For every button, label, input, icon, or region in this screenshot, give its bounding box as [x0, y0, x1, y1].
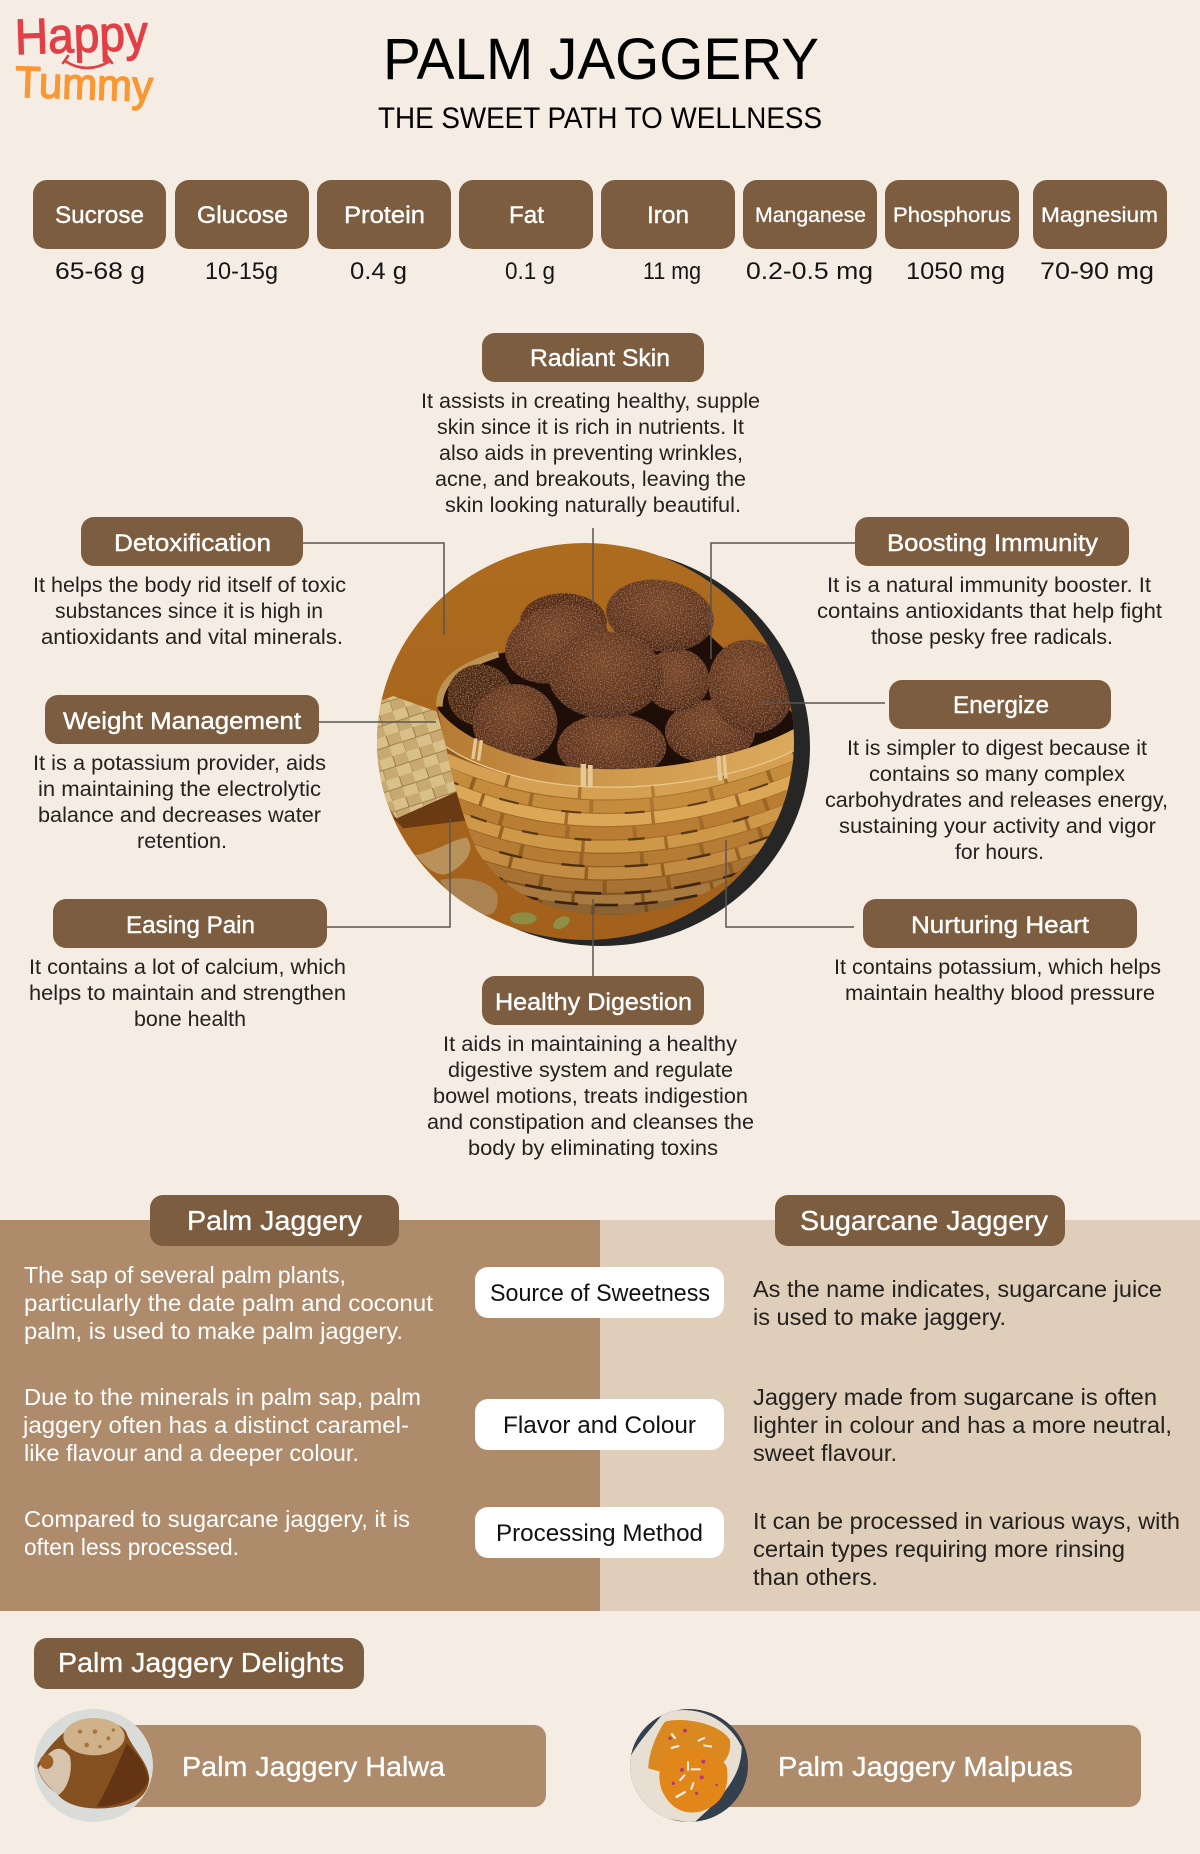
benefit: easing pain: [29, 899, 346, 1031]
benefit: radiant skin: acne, and breakouts, leaving the: [435, 468, 746, 491]
benefit: healthy digestion: digestive system and regulate: [448, 1059, 733, 1082]
nutrient: manganese: Manganese: [755, 204, 866, 227]
benefit: nurturing heart: [834, 899, 1161, 1005]
benefit: radiant skin: also aids in preventing wrinkles,: [439, 442, 743, 465]
nutrient: magnesium: Magnesium: [1041, 204, 1158, 227]
photo: halwa: [34, 1709, 153, 1822]
nutrient: protein: Protein: [344, 202, 425, 229]
benefit: healthy digestion: It aids in maintaining a healthy: [443, 1033, 738, 1056]
nutrient: sucrose: Sucrose: [55, 202, 144, 229]
benefit: energize: It is simpler to digest because it: [847, 737, 1147, 760]
panel: sugarcane jaggery comparison: than others.: [753, 1564, 878, 1590]
panel: palm jaggery comparison: [0, 1195, 600, 1611]
benefit: weight management: retention.: [137, 830, 227, 853]
nutrient: iron: Iron: [647, 202, 689, 229]
nutrient: magnesium: 70-90 mg: [1040, 258, 1154, 285]
card: palm jaggery malpuas: [625, 1705, 1141, 1825]
panel: palm jaggery comparison: like flavour and a deeper colour.: [24, 1440, 359, 1466]
basket rim: [437, 708, 795, 787]
panel: sugarcane jaggery comparison: lighter in colour and has a more neutral,: [753, 1412, 1172, 1438]
nutrient: manganese: [743, 180, 877, 285]
heading: sugarcane jaggery: Sugarcane Jaggery: [800, 1205, 1048, 1236]
woven packet: [373, 696, 457, 818]
label: processing method: Processing Method: [496, 1520, 703, 1547]
panel: palm jaggery comparison: Due to the minerals in palm sap, palm: [24, 1384, 421, 1410]
benefit: healthy digestion: Healthy Digestion: [495, 989, 692, 1016]
panel: palm jaggery comparison: particularly the date palm and coconut: [24, 1290, 434, 1316]
cardamom: [510, 912, 537, 924]
connector lines: [303, 528, 885, 976]
benefit: weight management: in maintaining the electrolytic: [38, 778, 321, 801]
panel: palm jaggery comparison: The sap of several palm plants,: [24, 1262, 346, 1288]
benefit: weight management: Weight Management: [63, 708, 301, 735]
ginger: [415, 837, 470, 874]
benefit: energize: for hours.: [955, 841, 1044, 864]
panel: palm jaggery comparison: jaggery often has a distinct caramel-: [22, 1412, 409, 1438]
benefit: nurturing heart: Nurturing Heart: [911, 912, 1089, 939]
benefit: boosting immunity: It is a natural immunity booster. It: [827, 574, 1151, 597]
panel: sugarcane jaggery comparison: is used to make jaggery.: [753, 1304, 1006, 1330]
nutrient: glucose: 10-15g: [205, 258, 278, 285]
dark circle behind photo: [392, 548, 810, 946]
benefit: boosting immunity: [817, 517, 1162, 649]
benefit: nurturing heart: It contains potassium, which helps: [834, 956, 1161, 979]
panel: sugarcane jaggery comparison: Jaggery made from sugarcane is often: [753, 1384, 1157, 1410]
benefit: detoxification: antioxidants and vital minerals.: [41, 626, 343, 649]
panel: sugarcane jaggery comparison: [600, 1195, 1200, 1611]
nutrient: fat: [459, 180, 593, 285]
logo: Happy Tummy: Happy: [14, 5, 149, 65]
basket body: [446, 747, 795, 915]
benefit: detoxification: substances since it is high in: [55, 600, 323, 623]
floor shadow: [393, 792, 470, 828]
label: source of sweetness: [475, 1267, 724, 1318]
benefit: easing pain: Easing Pain: [126, 912, 255, 939]
heading: palm jaggery delights: [34, 1638, 364, 1689]
benefit: radiant skin: [421, 333, 760, 517]
benefit: easing pain: It contains a lot of calcium, which: [29, 956, 346, 979]
panel: sugarcane jaggery comparison: certain types requiring more rinsing: [753, 1536, 1125, 1562]
logo: Happy Tummy: Tummy: [14, 58, 154, 112]
benefit: healthy digestion: and constipation and cleanses the: [427, 1111, 754, 1134]
benefit: radiant skin: skin looking naturally beautiful.: [445, 494, 741, 517]
label: flavor and colour: [475, 1399, 724, 1450]
panel: sugarcane jaggery comparison: As the name indicates, sugarcane juice: [753, 1276, 1162, 1302]
photo: basket of palm jaggery: [370, 535, 806, 950]
panel: palm jaggery comparison: palm, is used to make palm jaggery.: [24, 1318, 403, 1344]
benefit: radiant skin: Radiant Skin: [530, 345, 670, 372]
benefit: easing pain: bone health: [134, 1008, 246, 1031]
benefit: nurturing heart: maintain healthy blood pressure: [845, 982, 1155, 1005]
nutrient: fat: 0.1 g: [505, 258, 555, 285]
nutrient: manganese: 0.2-0.5 mg: [746, 258, 873, 285]
heading: sugarcane jaggery: [775, 1195, 1065, 1246]
benefit: weight management: [33, 695, 326, 853]
nutrient: phosphorus: 1050 mg: [906, 258, 1005, 285]
panel: palm jaggery comparison: often less processed.: [24, 1534, 239, 1560]
panel: sugarcane jaggery comparison: It can be processed in various ways, with: [753, 1508, 1180, 1534]
benefit: energize: carbohydrates and releases energy,: [825, 789, 1168, 812]
heading: palm jaggery delights: Palm Jaggery Delights: [58, 1647, 344, 1678]
card: palm jaggery malpuas: Palm Jaggery Malpuas: [778, 1751, 1073, 1782]
panel: palm jaggery comparison: Compared to sugarcane jaggery, it is: [24, 1506, 410, 1532]
benefit: energize: contains so many complex: [869, 763, 1126, 786]
card: palm jaggery halwa: Palm Jaggery Halwa: [182, 1751, 445, 1782]
benefit: detoxification: It helps the body rid itself of toxic: [33, 574, 346, 597]
heading: palm jaggery: Palm Jaggery: [187, 1205, 362, 1236]
nutrient: glucose: [175, 180, 309, 285]
benefit: boosting immunity: contains antioxidants that help fight: [817, 600, 1162, 623]
nutrient: phosphorus: Phosphorus: [893, 204, 1011, 227]
label: flavor and colour: Flavor and Colour: [503, 1412, 696, 1439]
benefit: easing pain: helps to maintain and strengthen: [29, 982, 346, 1005]
label: source of sweetness: Source of Sweetness: [490, 1280, 710, 1307]
subtitle: THE SWEET PATH TO WELLNESS: [378, 102, 822, 135]
benefit: healthy digestion: bowel motions, treats indigestion: [433, 1085, 748, 1108]
benefit: radiant skin: It assists in creating healthy, supple: [421, 390, 760, 413]
benefit: weight management: balance and decreases water: [38, 804, 321, 827]
benefit: radiant skin: skin since it is rich in nutrients. It: [437, 416, 744, 439]
nutrient: phosphorus: [885, 180, 1019, 285]
nutrient table: [33, 180, 1167, 285]
heading: palm jaggery: [150, 1195, 399, 1246]
label: processing method: [475, 1507, 724, 1558]
card: palm jaggery halwa: [30, 1705, 546, 1825]
benefit: energize: [825, 680, 1168, 864]
logo: Happy Tummy: [14, 5, 154, 112]
title: PALM JAGGERY: [383, 27, 819, 92]
nutrient: glucose: Glucose: [197, 202, 288, 229]
nutrient: protein: [317, 180, 451, 285]
nutrient: protein: 0.4 g: [350, 258, 407, 285]
nutrient: sucrose: [33, 180, 166, 285]
benefit: healthy digestion: [427, 976, 754, 1160]
basket interior: [437, 634, 794, 768]
benefit: detoxification: Detoxification: [114, 530, 271, 557]
nutrient: sucrose: 65-68 g: [55, 258, 145, 285]
photo: malpuas: [630, 1709, 748, 1822]
benefit: weight management: It is a potassium provider, aids: [33, 752, 326, 775]
benefit: boosting immunity: those pesky free radicals.: [871, 626, 1113, 649]
benefit: boosting immunity: Boosting Immunity: [887, 530, 1098, 557]
jaggery balls: [448, 579, 790, 770]
nutrient: iron: [601, 180, 735, 285]
nutrient: iron: 11 mg: [643, 258, 701, 285]
benefit: detoxification: [33, 517, 346, 649]
benefit: healthy digestion: body by eliminating toxins: [468, 1137, 718, 1160]
nutrient: magnesium: [1033, 180, 1167, 285]
benefit: energize: sustaining your activity and vigor: [839, 815, 1156, 838]
panel: sugarcane jaggery comparison: sweet flavour.: [753, 1440, 897, 1466]
benefit: energize: Energize: [953, 692, 1049, 719]
nutrient: fat: Fat: [509, 202, 544, 229]
